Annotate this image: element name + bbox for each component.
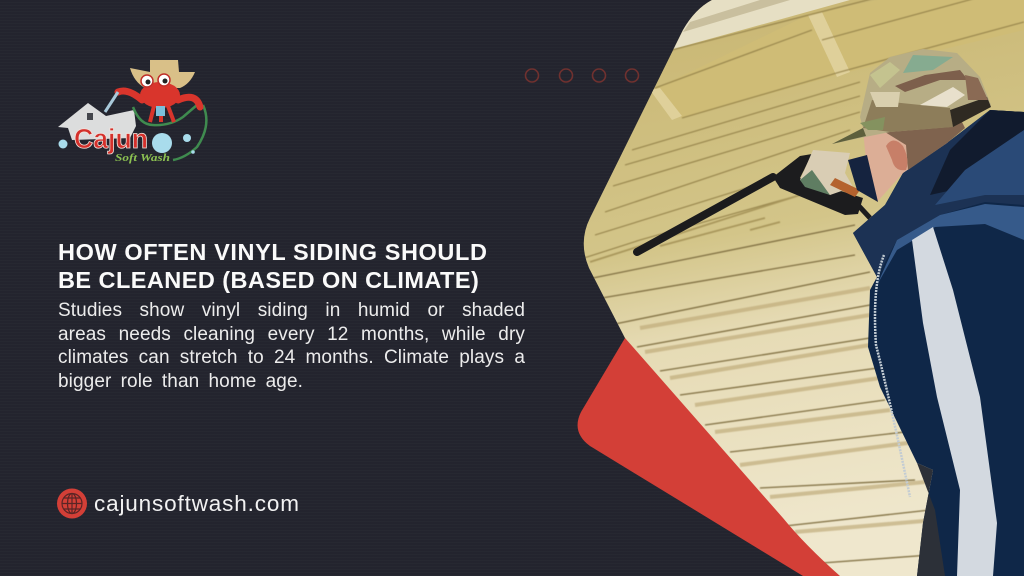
soffit bbox=[670, 0, 850, 50]
body text bbox=[58, 300, 525, 392]
logo house bbox=[58, 103, 136, 140]
man: blue vest collar bbox=[853, 110, 1024, 277]
logo crawfish mascot bbox=[105, 60, 200, 122]
man: white sleeve stripe bbox=[912, 227, 997, 576]
heading: BE CLEANED (BASED ON CLIMATE) bbox=[58, 267, 479, 293]
body text: bigger role than home age. bbox=[58, 371, 303, 392]
man: drawstring bbox=[875, 255, 910, 497]
body text: climates can stretch to 24 months. Climate plays a bbox=[58, 347, 525, 368]
logo bubbles bbox=[58, 133, 195, 154]
logo: Cajun Soft Wash: Soft Wash bbox=[115, 152, 170, 164]
website url: cajunsoftwash.com bbox=[94, 491, 300, 516]
body text: Studies show vinyl siding in humid or shaded bbox=[58, 300, 525, 321]
man: neck and face bbox=[863, 125, 965, 202]
heading bbox=[58, 239, 488, 293]
body text: areas needs cleaning every 12 months, while dry bbox=[58, 324, 525, 345]
heading: HOW OFTEN VINYL SIDING SHOULD bbox=[58, 239, 488, 265]
logo wordmark: Cajun bbox=[74, 123, 148, 154]
photo: man pressure washing vinyl siding bbox=[584, 0, 1024, 576]
man: lower clothing bbox=[917, 463, 945, 576]
man: camo hat bbox=[832, 49, 991, 144]
pressure washer gun bbox=[637, 154, 870, 252]
gloved hand bbox=[800, 150, 878, 202]
logo hose bbox=[133, 105, 206, 160]
man: jacket bbox=[853, 110, 1024, 576]
